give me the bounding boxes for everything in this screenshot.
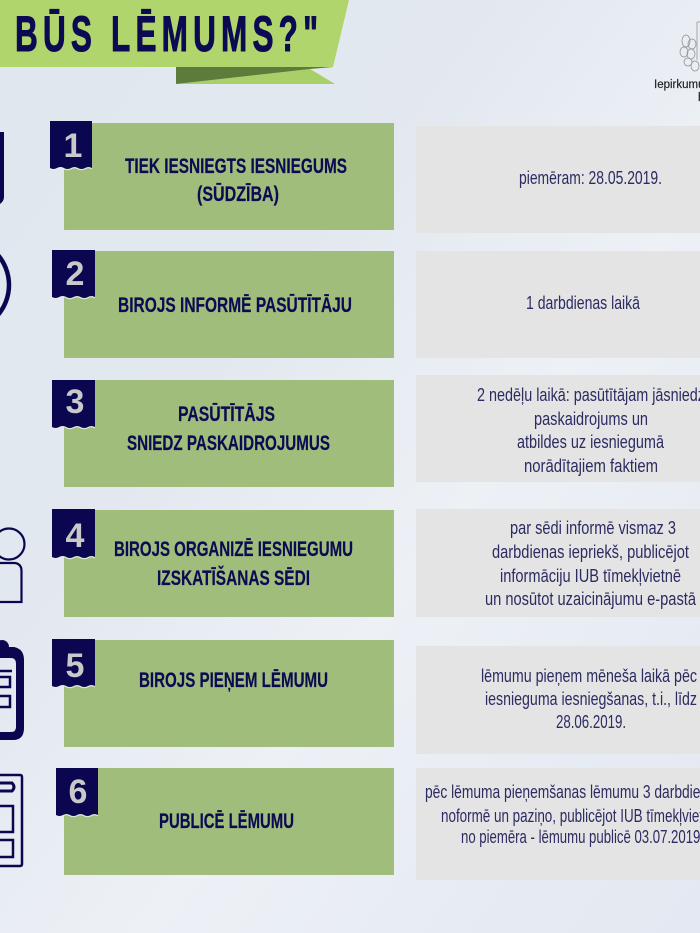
badge 3 xyxy=(52,380,95,429)
panel: step 3 detail: atbildes uz iesniegumā xyxy=(517,432,665,452)
panel: step 5 detail xyxy=(416,646,700,754)
step 1 label: TIEK IESNIEGTS IESNIEGUMS xyxy=(125,155,347,178)
badge 6: 6 xyxy=(69,773,87,811)
panel: step 3 detail xyxy=(416,375,700,482)
step 4 label: IZSKATĪŠANAS SĒDI xyxy=(157,566,310,590)
panel: step 1 detail xyxy=(416,126,700,233)
panel: step 3 xyxy=(52,380,394,487)
step 1 label: (SŪDZĪBA) xyxy=(197,183,279,206)
panel: step 3 detail: paskaidrojums un xyxy=(534,409,648,429)
step 3 label xyxy=(127,403,330,455)
title banner xyxy=(0,0,349,84)
panel: step 6 xyxy=(56,768,394,875)
step 1 label xyxy=(125,155,347,206)
step 5 label: BIROJS PIEŅEM LĒMUMU xyxy=(139,669,328,692)
panel: step 5 xyxy=(52,639,394,747)
badge 5: 5 xyxy=(66,647,84,685)
step 4 label: BIROJS ORGANIZĒ IESNIEGUMU xyxy=(114,538,353,561)
panel: step 4 xyxy=(52,509,394,617)
badge 2: 2 xyxy=(66,255,84,293)
badge 3: 3 xyxy=(66,383,84,421)
badge 5 xyxy=(52,639,95,688)
panel: step 2 xyxy=(52,250,394,358)
panel: step 2 detail: 1 darbdienas laikā xyxy=(526,293,641,313)
logo: Iepirkumu uzraudzības birojs xyxy=(654,22,700,104)
badge 6 xyxy=(56,768,98,817)
badge 2 xyxy=(52,250,95,299)
step 4 label xyxy=(114,538,353,590)
icon: step 2 circle xyxy=(0,239,9,331)
icon: step 4 people xyxy=(0,528,24,602)
title: BŪS LĒMUMS?" xyxy=(15,6,318,62)
panel: step 6 detail xyxy=(416,768,700,880)
panel: step 2 detail xyxy=(416,251,700,358)
panel: step 1 xyxy=(50,121,394,230)
banner fold xyxy=(176,67,335,84)
badge 4: 4 xyxy=(66,517,85,555)
badge 4 xyxy=(52,509,95,559)
icon: oak wreath emblem xyxy=(680,22,700,71)
step 6 label: PUBLICĒ LĒMUMU xyxy=(159,810,294,833)
panel: step 5 detail: 28.06.2019. xyxy=(556,712,626,732)
step 3 label: SNIEDZ PASKAIDROJUMUS xyxy=(127,432,330,455)
icon: step 6 form xyxy=(0,775,22,866)
icon: step 1 shield xyxy=(0,132,4,204)
step 3 label: PASŪTĪTĀJS xyxy=(178,403,275,426)
panel: step 4 detail xyxy=(416,509,700,617)
panel: step 3 detail: norādītajiem faktiem xyxy=(524,456,658,476)
panel: step 1 detail: piemēram: 28.05.2019. xyxy=(519,168,662,188)
badge 1: 1 xyxy=(64,127,82,165)
badge 1 xyxy=(50,121,92,170)
step 2 label: BIROJS INFORMĒ PASŪTĪTĀJU xyxy=(118,294,352,317)
icon: step 5 clipboard xyxy=(0,640,24,740)
